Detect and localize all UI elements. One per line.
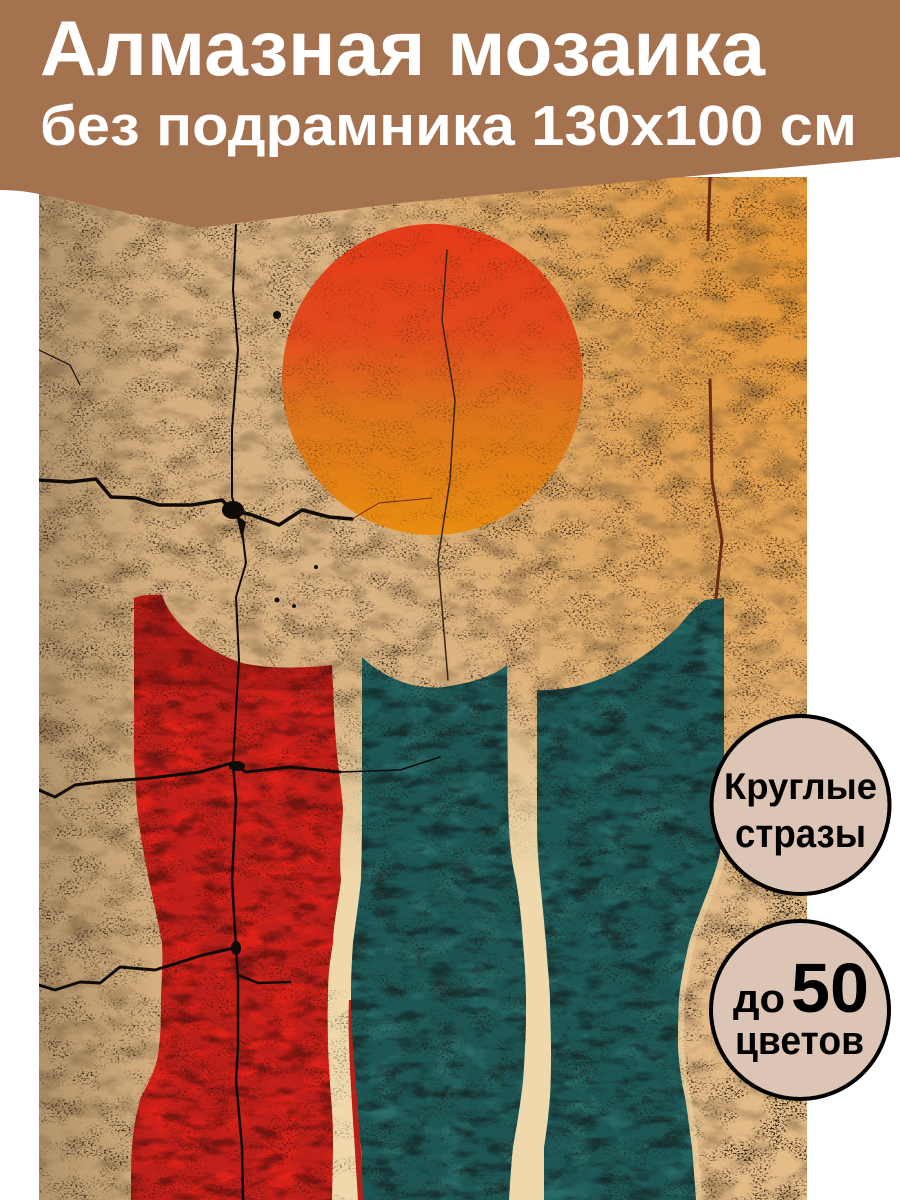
- red pillar: [131, 594, 343, 1200]
- badge: up to 50 colours: цветов: [735, 1019, 864, 1063]
- cream gaps between pillars: [328, 690, 552, 1200]
- subtitle: без подрамника 130х100 см: [40, 94, 857, 158]
- cream band right of the teal pillar: [678, 848, 726, 1200]
- badge: up to 50 colours: [711, 921, 889, 1099]
- badge: round rhinestones: Круглые: [724, 766, 877, 807]
- header banner: [0, 0, 900, 228]
- badge: up to 50 colours: до: [733, 977, 785, 1021]
- red sliver behind centre teal pillar: [349, 1000, 364, 1200]
- sun: [282, 224, 583, 535]
- artwork: abstract sun and pillars on cracked wall: [39, 177, 807, 1200]
- teal pillars: [345, 590, 730, 1200]
- badge: up to 50 colours: 50: [791, 949, 869, 1027]
- badge: round rhinestones: [712, 716, 890, 894]
- badge: round rhinestones: стразы: [735, 812, 866, 856]
- cracks: [39, 177, 722, 1200]
- title: Алмазная мозаика: [40, 4, 766, 92]
